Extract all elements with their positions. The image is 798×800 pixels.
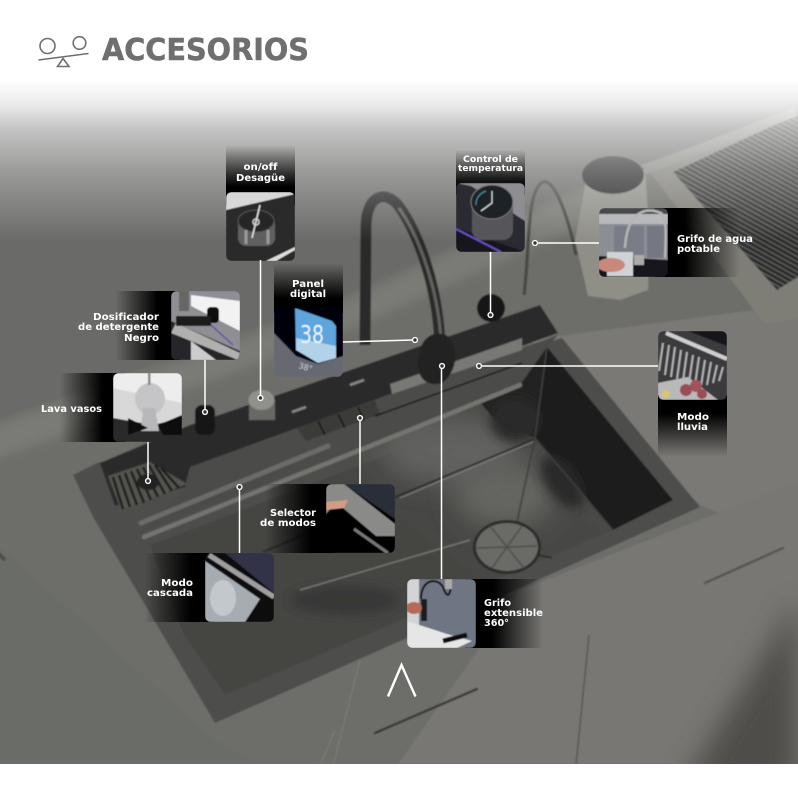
title: ACCESORIOS <box>102 33 309 68</box>
rinser basket <box>108 462 187 510</box>
main faucet <box>365 197 455 384</box>
callout: control de temperatura: Control de <box>463 155 518 165</box>
callout: grifo extensible 360°: extensible <box>484 608 543 619</box>
counter tray <box>642 116 798 310</box>
callout: on/off desagüe: Desagüe <box>236 173 285 184</box>
callout: selector de modos: Selector <box>270 508 316 519</box>
basin seams <box>263 439 535 552</box>
callout: control de temperatura: temperatura <box>458 164 523 174</box>
callout: lava vasos: Lava vasos <box>41 404 102 415</box>
callout: panel digital <box>274 263 417 377</box>
callout: modo lluvia: lluvia <box>677 422 708 433</box>
callout: grifo de agua potable: Grifo de agua <box>677 234 753 245</box>
kettle <box>575 112 795 300</box>
callout: grifo de agua potable: potable <box>677 244 720 255</box>
callout: on/off desagüe <box>226 145 295 400</box>
callout: dosificador de detergente negro: Negro <box>124 333 159 344</box>
callout: lava vasos <box>41 373 182 483</box>
logo mark <box>388 665 416 696</box>
callout: modo cascada: cascada <box>147 588 193 599</box>
callout: panel digital: digital <box>290 289 326 300</box>
callout: panel digital: 38 <box>300 320 324 349</box>
dispenser and drain knob <box>195 380 364 435</box>
callout: modo cascada: Modo <box>161 578 193 589</box>
callout: control de temperatura <box>456 150 525 317</box>
temperature knob <box>477 294 505 322</box>
callout: selector de modos <box>260 416 395 553</box>
white top fade overlay <box>0 0 798 240</box>
small faucet <box>524 182 576 295</box>
panel front face <box>379 335 558 438</box>
callout: selector de modos: de modos <box>260 518 316 529</box>
callout: modo cascada <box>145 485 274 622</box>
countertop handle right <box>705 548 783 583</box>
callout: dosificador de detergente negro: de detergente <box>78 322 159 333</box>
callout: grifo extensible 360°: Grifo <box>484 598 511 609</box>
sink basin <box>152 468 582 694</box>
callout: dosificador de detergente negro: Dosificador <box>93 312 159 323</box>
callout: grifo extensible 360° <box>406 364 543 648</box>
sink deck <box>73 338 700 723</box>
mode selector buttons <box>297 338 522 441</box>
drain <box>473 520 552 574</box>
callout: panel digital: 38° <box>297 361 314 374</box>
callout: grifo de agua potable <box>533 208 753 277</box>
basin dark walls <box>535 347 673 530</box>
callout: modo lluvia <box>477 331 727 457</box>
callout: modo lluvia: Modo <box>677 412 709 423</box>
callout: grifo extensible 360°: 360° <box>484 618 509 629</box>
callout: dosificador de detergente negro <box>78 291 240 414</box>
callout: on/off desagüe: on/off <box>244 162 278 173</box>
callout: panel digital: Panel <box>292 279 324 290</box>
top control panel <box>100 305 558 506</box>
heading icon: balance <box>38 37 88 66</box>
waterfall slots <box>141 385 520 537</box>
countertop handle <box>375 689 477 733</box>
